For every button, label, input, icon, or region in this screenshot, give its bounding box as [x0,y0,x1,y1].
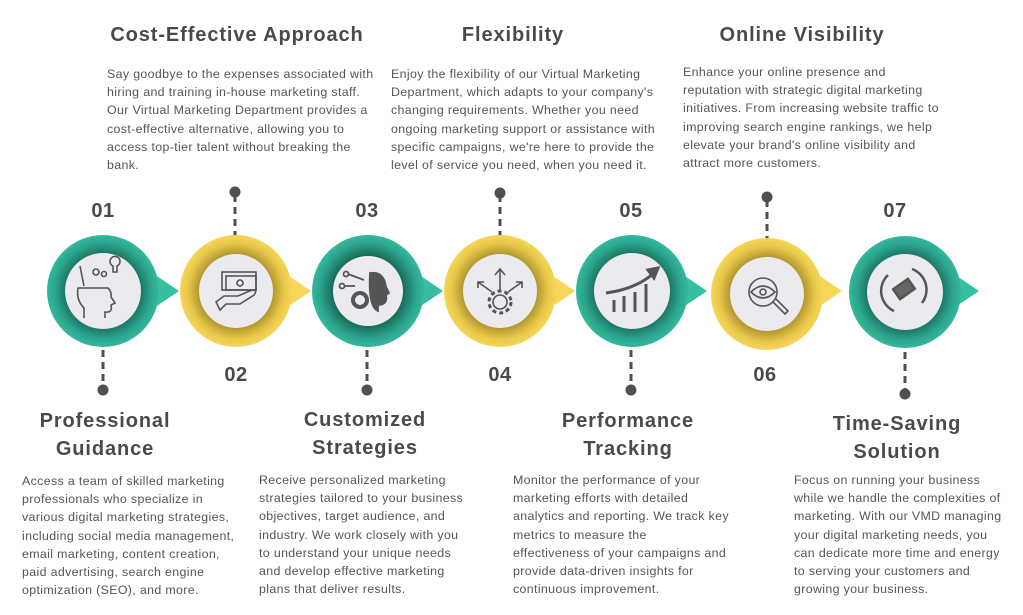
title: flexibility: Flexibility [462,24,564,46]
text: performance tracking: Monitor the performance of your marketing efforts with detailed analytics and reporting. We track key metrics to measure the effectiveness of your campaigns and provide data-driven insights for continuous improvement. [513,473,729,596]
step 1 circle [47,235,179,347]
title: customized strategies: Customized [304,409,426,431]
title: time-saving [832,413,961,463]
text: flexibility: Enjoy the flexibility of our Virtual Marketing Department, which adapts to your company's changing requirements. Whether you need ongoing marketing support or assistance with specific campaigns, we're here to provide the level of service you need, when you need it. [391,67,655,172]
step 6 circle [711,238,842,350]
title: customized strategies [304,409,426,459]
number 05: 05 [619,200,643,222]
step 5 circle [576,235,707,347]
title: professional guidance: Professional [40,410,170,432]
text: time-saving: Focus on running your business while we handle the complexities of marketing. With our VMD managing your digital marketing needs, you can dedicate more time and energy to serving your customers and growing your business. [794,473,1001,596]
title: performance tracking: Performance [562,410,694,432]
title: time-saving: Time-Saving [833,413,961,435]
number 04: 04 [488,364,512,386]
step 7 circle [849,236,979,348]
title: performance tracking [562,410,694,460]
text: online visibility: Enhance your online presence and reputation with strategic digital marketing initiatives. From increasing website traffic to improving search engine rankings, we help elevate your brand's online visibility and attract more customers. [683,65,939,170]
text: cost-effective: Say goodbye to the expenses associated with hiring and training in-house marketing staff. Our Virtual Marketing Department provides a cost-effective alternative, allowing you to access top-tier talent without breaking the bank. [107,67,373,172]
title: performance tracking: Tracking [583,438,673,460]
title: professional guidance [40,410,170,460]
text: customized strategies: Receive personalized marketing strategies tailored to your business objectives, target audience, and industry. We work closely with you to understand your unique needs and develop effective marketing plans that deliver results. [259,473,463,596]
number 03: 03 [355,200,379,222]
title: cost-effective: Cost-Effective Approach [110,24,364,46]
number 07: 07 [883,200,907,222]
number 01: 01 [91,200,115,222]
title: professional guidance: Guidance [56,438,154,460]
text: professional guidance: Access a team of skilled marketing professionals who specialize in various digital marketing strategies, including social media management, email marketing, content creation, paid advertising, search engine optimization (SEO), and more. [22,474,234,597]
title: online visibility: Online Visibility [720,24,884,46]
number 06: 06 [753,364,777,386]
title: customized strategies: Strategies [312,437,418,459]
number 02: 02 [224,364,248,386]
step 3 circle [312,235,443,347]
step 2 circle [180,235,311,347]
title: time-saving: Solution [853,441,941,463]
step 4 circle [444,235,575,347]
